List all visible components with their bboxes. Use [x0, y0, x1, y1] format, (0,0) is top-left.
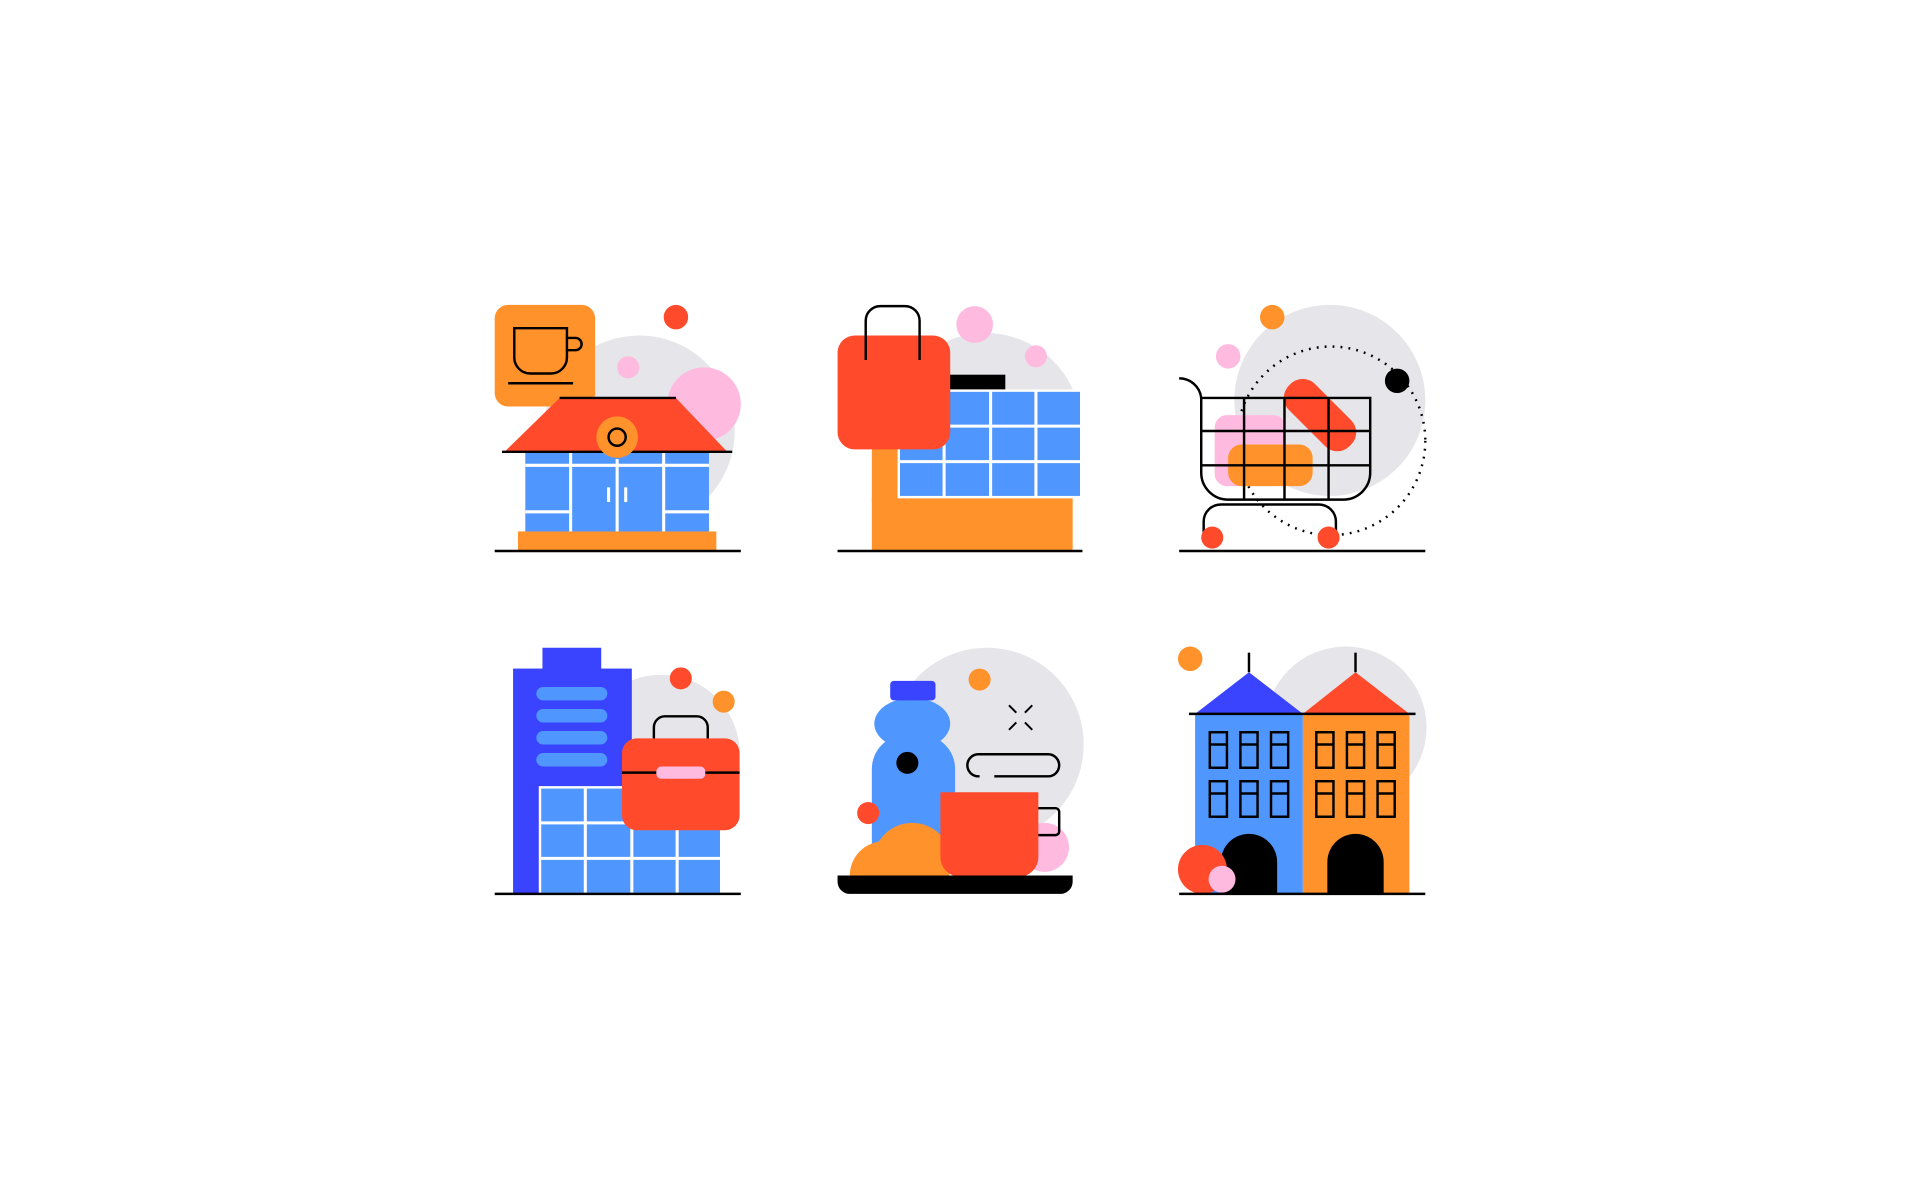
icon: bottle and food tray	[838, 648, 1084, 910]
icon: townhouses	[1178, 647, 1427, 894]
icon: coffee shop	[495, 305, 741, 551]
icon: office building with briefcase	[495, 648, 741, 894]
icon: shopping cart	[1179, 305, 1425, 551]
icon: shopping bag and mall	[838, 306, 1082, 551]
